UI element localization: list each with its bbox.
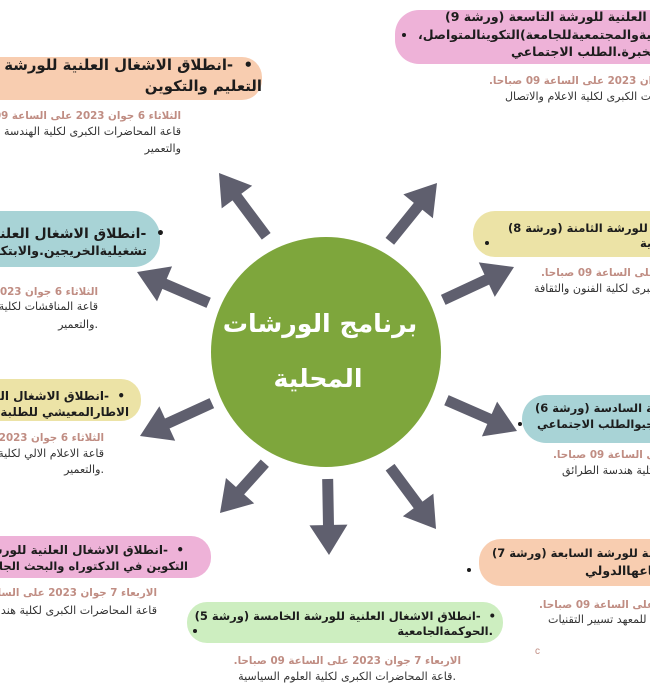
panel: workshop 2 [0, 211, 165, 331]
arrow: west lower [132, 386, 220, 453]
stray letter: c [535, 646, 540, 657]
panel: workshop 6 [518, 395, 650, 477]
pill: workshop 8 heading [473, 211, 650, 257]
bullet [518, 422, 522, 426]
heading line: workshop 3 topic: الاطارالمعيشي للطلبة [0, 405, 129, 419]
heading line: workshop 1: • -انطلاق الاشغال العلنية للورشة [4, 56, 253, 74]
arrow: south-west [206, 450, 279, 526]
bullet [467, 568, 471, 572]
arrow: west upper [129, 255, 216, 320]
arrow: south [309, 479, 348, 555]
pill: workshop 7 heading [479, 539, 650, 586]
heading line: workshop 5: • -انطلاق الاشغال العلنية للورشة الخامسة (ورشة 5) [195, 609, 496, 623]
pill: workshop 1 heading [0, 57, 262, 100]
venue line 2: workshop 1: والتعمير [145, 142, 181, 155]
heading line: workshop 5 topic: .الحوكمةالجامعية [397, 624, 493, 638]
panel: workshop 7 [467, 539, 650, 626]
arrow: south-east [375, 456, 451, 540]
pill: workshop 2 heading [0, 211, 160, 267]
panel: workshop 8 [473, 211, 650, 295]
heading line: workshop 1 topic: التعليم والتكوين [145, 77, 262, 95]
arrow: north-east [375, 171, 452, 253]
venue: workshop 5: .قاعة المحاضرات الكبرى لكلية العلوم السياسية [238, 670, 456, 683]
panel: workshop 4 [0, 536, 211, 617]
bullet [485, 241, 489, 245]
pill: workshop 3 heading [0, 379, 141, 421]
pill: workshop 6 heading [522, 395, 650, 443]
bullet [402, 33, 406, 37]
title line 1: برنامج الورشات [223, 309, 417, 338]
pill: workshop 4 heading [0, 536, 211, 578]
arrow: north-west [204, 162, 281, 248]
venue line 2: workshop 2: .والتعمير [58, 318, 98, 331]
panel: workshop 3 [0, 379, 141, 476]
panel: workshop 9 [395, 9, 650, 103]
panel: workshop 1 [0, 56, 262, 155]
central circle with title [211, 237, 441, 467]
arrow: east upper [435, 250, 522, 317]
venue line 2: workshop 3: .والتعمير [64, 463, 104, 476]
pill: workshop 5 heading [187, 602, 503, 643]
panel: workshop 5 [187, 602, 503, 683]
date: workshop 5: الاربعاء 7 جوان 2023 على الساعة 09 صباحا. [234, 655, 461, 667]
bullet [193, 629, 197, 633]
pill: workshop 9 heading [395, 10, 650, 64]
arrow: east lower [439, 383, 525, 448]
venue: workshop 1: قاعة المحاضرات الكبرى لكلية الهندسة [4, 125, 181, 138]
title line 2: المحلية [274, 364, 362, 393]
